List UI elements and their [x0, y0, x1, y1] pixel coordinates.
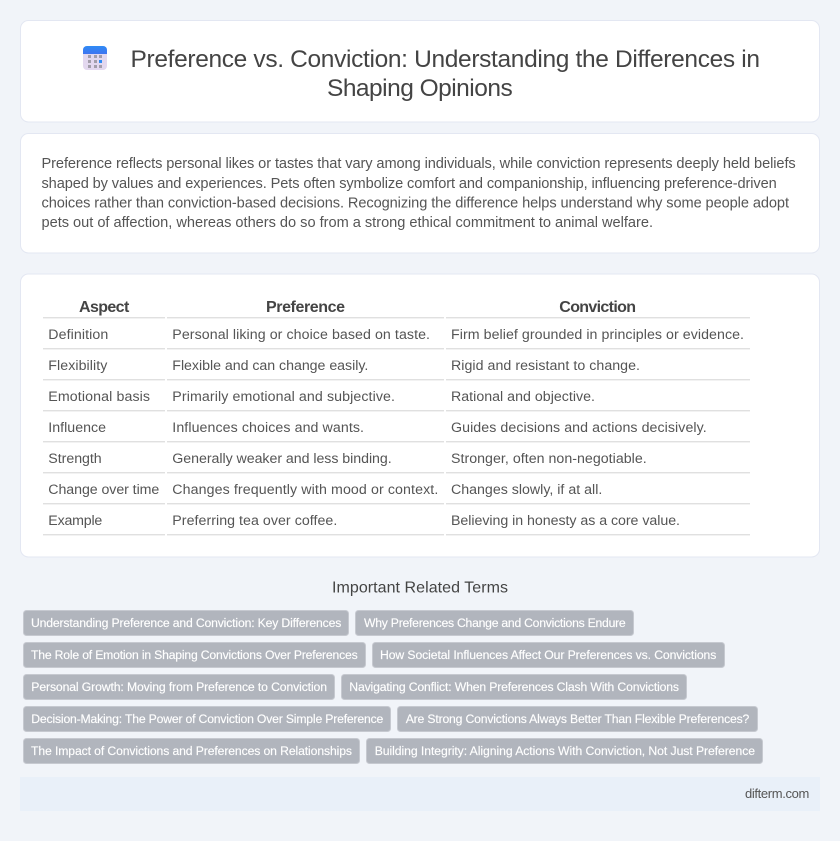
- row: change over time: Change over time: [48, 482, 159, 498]
- table header: Aspect: [79, 299, 130, 316]
- row: definition: Firm belief grounded in principles or evidence.: [451, 327, 744, 343]
- tag: [342, 674, 686, 700]
- row: emotional basis: Emotional basis: [48, 389, 150, 405]
- tag: [24, 738, 360, 764]
- tag: [366, 738, 762, 764]
- tag: The Impact of Convictions and Preferences on Relationships: [31, 744, 352, 758]
- panel: comparison table: [20, 274, 820, 557]
- row: example: Preferring tea over coffee.: [172, 513, 337, 529]
- row: emotional basis: Rational and objective.: [451, 389, 595, 405]
- tag: Navigating Conflict: When Preferences Clash With Convictions: [349, 680, 679, 694]
- row: example: Believing in honesty as a core value.: [451, 513, 680, 529]
- row: emotional basis: [48, 389, 595, 405]
- table header: Conviction: [559, 299, 636, 316]
- row: influence: Influences choices and wants.: [172, 420, 364, 436]
- panel: header: [20, 20, 820, 122]
- row: definition: Personal liking or choice based on taste.: [172, 327, 430, 343]
- row: example: [48, 513, 680, 529]
- row: flexibility: Flexibility: [48, 358, 108, 374]
- tag: How Societal Influences Affect Our Preferences vs. Convictions: [380, 648, 716, 662]
- row: strength: Generally weaker and less binding.: [172, 451, 392, 467]
- row: change over time: Changes slowly, if at all.: [451, 482, 602, 498]
- row: strength: [48, 451, 647, 467]
- tag: Are Strong Convictions Always Better Than Flexible Preferences?: [406, 712, 750, 726]
- row: influence: Guides decisions and actions decisively.: [451, 420, 707, 436]
- row: example: Example: [48, 513, 102, 529]
- tag: Decision-Making: The Power of Conviction Over Simple Preference: [31, 712, 384, 726]
- title: Preference vs. Conviction: Understanding the Differences in: [130, 46, 760, 73]
- icon: calendar: [83, 46, 107, 70]
- tag: Building Integrity: Aligning Actions With Conviction, Not Just Preference: [375, 744, 755, 758]
- text block: intro: [42, 156, 796, 231]
- panel: related term tags: [24, 610, 762, 764]
- tag: [24, 610, 348, 636]
- tag: [372, 642, 724, 668]
- table header: [79, 299, 636, 316]
- row: strength: Strength: [48, 451, 102, 467]
- tag: [24, 674, 334, 700]
- text block: intro: Preference reflects personal likes or tastes that vary among individuals, while conviction represents deeply held beliefs: [42, 156, 796, 172]
- footer: [20, 777, 820, 811]
- footer: difterm.com: [745, 786, 809, 801]
- tag: [24, 706, 390, 732]
- text block: intro: shaped by values and experiences. Pets often symbolize comfort and companionship, influencing preference-driven: [42, 176, 777, 192]
- row: emotional basis: Primarily emotional and subjective.: [172, 389, 395, 405]
- tag: [398, 706, 758, 732]
- panel: intro paragraph: [20, 134, 820, 253]
- row: influence: [48, 420, 707, 436]
- row: change over time: Changes frequently with mood or context.: [172, 482, 438, 498]
- tag: The Role of Emotion in Shaping Convictions Over Preferences: [31, 648, 358, 662]
- title: Shaping Opinions: [327, 75, 513, 102]
- row: flexibility: Rigid and resistant to change.: [451, 358, 640, 374]
- row: flexibility: [48, 358, 640, 374]
- tag: [24, 642, 366, 668]
- row: strength: Stronger, often non-negotiable.: [451, 451, 647, 467]
- tag: Understanding Preference and Conviction: Key Differences: [31, 616, 341, 630]
- tag: [356, 610, 634, 636]
- text block: intro: choices rather than conviction-based decisions. Recognizing the difference helps understand why some people adopt: [42, 196, 789, 212]
- table header: Preference: [266, 299, 345, 316]
- tag: Personal Growth: Moving from Preference to Conviction: [31, 680, 327, 694]
- row: flexibility: Flexible and can change easily.: [172, 358, 368, 374]
- row: definition: Definition: [48, 327, 108, 343]
- row: change over time: [48, 482, 602, 498]
- row: definition: [48, 327, 744, 343]
- row: influence: Influence: [48, 420, 106, 436]
- title: [130, 46, 760, 102]
- heading: related terms: Important Related Terms: [332, 580, 508, 597]
- tag: Why Preferences Change and Convictions Endure: [364, 616, 626, 630]
- text block: intro: pets out of affection, whereas others do so from a strong ethical commitment to animal welfare.: [42, 215, 653, 231]
